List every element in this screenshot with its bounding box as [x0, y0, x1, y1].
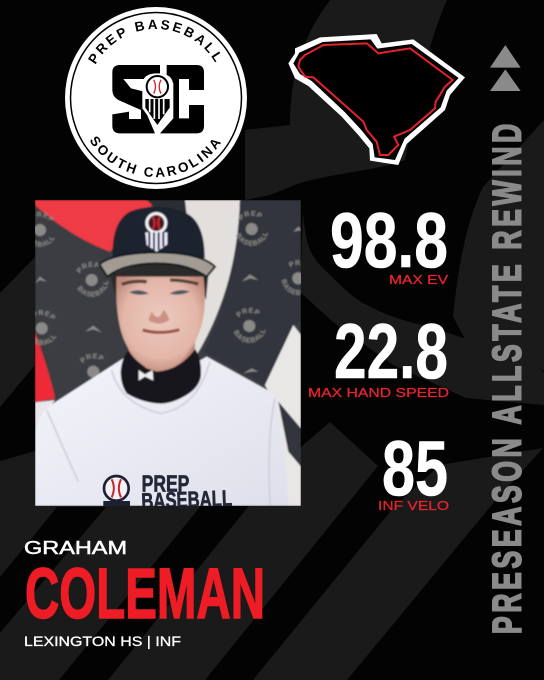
player first name: GRAHAM: [24, 538, 127, 558]
backdrop sponsor badges: PREP: [235, 306, 260, 318]
icon: double arrow: [490, 45, 521, 91]
vertical title: PRESEASON ALLSTATE REWIND: [485, 124, 530, 634]
cap logo: [145, 212, 167, 252]
stat: max hand speed: [308, 307, 449, 400]
brows: [122, 280, 198, 284]
backdrop sponsor badges: BASEBALL: [280, 278, 301, 296]
label: MAX EV: [389, 273, 449, 287]
stat: infield velocity: [378, 424, 449, 513]
stat: max exit velocity: [330, 196, 449, 287]
value: 98.8: [330, 196, 448, 284]
neck: [127, 342, 196, 373]
backdrop sponsor badges: PREP: [288, 259, 301, 268]
backdrop sponsor badges: BASEBALL: [233, 329, 266, 344]
label: INF VELO: [378, 499, 449, 513]
logo: Prep Baseball South Carolina badge: [65, 7, 247, 189]
mouth: [143, 330, 179, 332]
photo backdrop: [35, 200, 301, 506]
label: MAX HAND SPEED: [308, 386, 449, 400]
value: 85: [382, 424, 448, 512]
hair and under brim: [110, 264, 209, 300]
shirt: [35, 357, 288, 506]
shirt text BASEBALL: BASEBALL: [141, 485, 233, 514]
backdrop sponsor badges: PREP: [76, 261, 100, 274]
logo monogram SC: [112, 65, 204, 133]
backdrop sponsor badges: PREP: [35, 211, 54, 221]
school and position: LEXINGTON HS | INF: [24, 633, 181, 649]
shirt text PREP: PREP: [142, 471, 189, 497]
cap crown: [113, 207, 205, 258]
nose shadow: [148, 310, 169, 324]
cap brim: [99, 252, 215, 277]
value: 22.8: [334, 307, 448, 395]
icon: South Carolina state map: [288, 34, 465, 165]
shirt logo: [102, 474, 232, 506]
gaiter brand mark: [139, 370, 153, 381]
backdrop sponsor badges: BASEBALL: [77, 280, 109, 298]
backdrop sponsor badges: [34, 200, 301, 419]
backdrop sponsor badges: PREP: [239, 210, 263, 221]
logo top text: PREP BASEBALL: [88, 20, 220, 64]
backdrop sponsor badges: PREP: [35, 309, 56, 319]
shirt collar and seams: [47, 362, 275, 506]
logo bottom text: SOUTH CAROLINA: [90, 136, 222, 178]
backdrop sponsor badges: BASEBALL: [236, 232, 269, 247]
player last name: COLEMAN: [25, 555, 265, 634]
backdrop sponsor badges: BASEBALL: [35, 335, 57, 346]
neck gaiter: [121, 349, 201, 404]
backdrop sponsor badges: BASEBALL: [35, 236, 56, 248]
player photo: [35, 200, 301, 506]
backdrop sponsor badges: PREP: [80, 352, 104, 364]
face: [116, 277, 205, 370]
eyes: [129, 290, 190, 295]
